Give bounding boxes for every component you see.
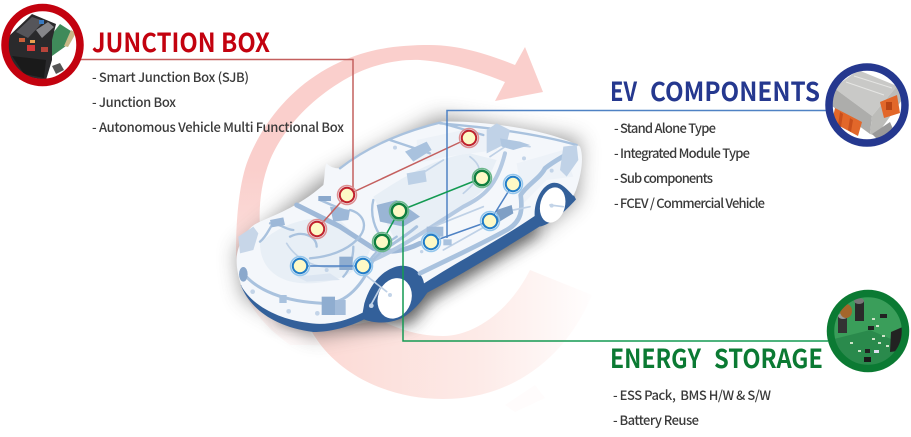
- wheels: [372, 184, 569, 323]
- text: energy storage list: - ESS Pack, BMS H/W & S/W: [613, 385, 771, 404]
- car underside: [241, 178, 576, 332]
- heading: energy storage: [610, 339, 823, 376]
- circular arrow: [236, 45, 592, 412]
- text: energy storage list: - Battery Reuse: [613, 410, 699, 429]
- text: energy storage list: [613, 385, 771, 429]
- wire connector dots: [250, 146, 554, 316]
- car shadow: [237, 117, 580, 337]
- heading: energy storage: ENERGY: [610, 339, 702, 376]
- ev components nodes: [290, 174, 522, 276]
- connector: ev components leader: [300, 110, 828, 266]
- pale interior shading: [260, 130, 573, 283]
- heading: energy storage: STORAGE: [714, 339, 823, 376]
- text: junction box list: - Junction Box: [92, 92, 176, 111]
- text: junction box list: - Autonomous Vehicle Multi Functional Box: [92, 117, 344, 136]
- text: ev components list: [614, 118, 765, 212]
- junction box nodes: [308, 128, 478, 238]
- text: ev components list: - Integrated Module Type: [614, 143, 750, 162]
- heading: junction box: JUNCTION BOX: [92, 23, 270, 60]
- icon: ev components photo: [829, 67, 905, 143]
- connector: junction box leader: [80, 60, 469, 229]
- heading: ev components: EV: [610, 72, 638, 109]
- icon: junction box photo: [5, 8, 80, 82]
- car body: [237, 121, 582, 324]
- car components: [238, 123, 578, 315]
- text: junction box list: - Smart Junction Box (SJB): [92, 67, 249, 86]
- text: junction box list: [92, 67, 344, 136]
- text: ev components list: - FCEV / Commercial Vehicle: [614, 193, 765, 212]
- wiring harness: [243, 123, 577, 307]
- car illustration: [237, 121, 582, 332]
- connector: energy storage leader: [382, 178, 828, 341]
- energy storage nodes: [372, 168, 492, 252]
- icon: energy storage photo: [830, 294, 906, 375]
- text: ev components list: - Sub components: [614, 168, 713, 187]
- heading: ev components: COMPONENTS: [650, 72, 820, 109]
- text: ev components list: - Stand Alone Type: [614, 118, 716, 137]
